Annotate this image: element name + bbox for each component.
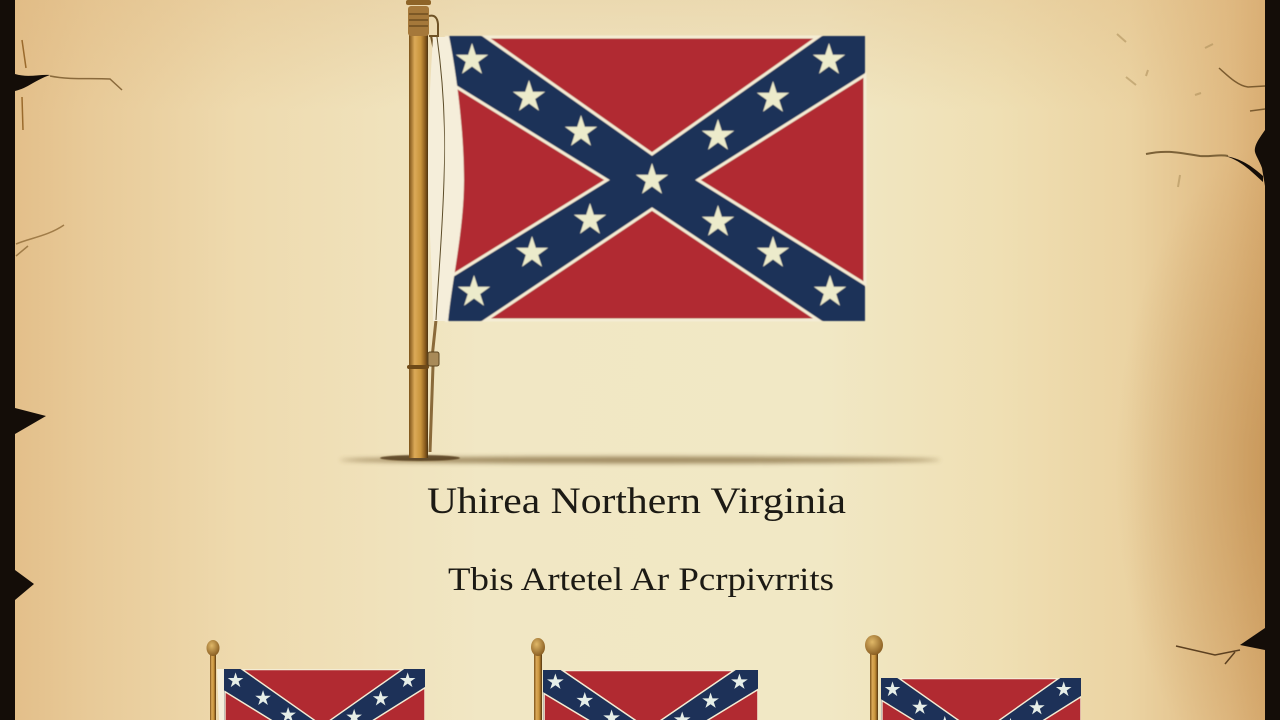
parchment background bbox=[0, 0, 1280, 187]
flag field bbox=[445, 36, 865, 322]
left border with cracks bbox=[0, 0, 122, 720]
small flag 2 bbox=[531, 638, 758, 720]
subtitle: Tbis Artetel Ar Pcrpivrrits bbox=[448, 562, 834, 598]
title: Uhirea Northern Virginia bbox=[427, 481, 846, 522]
small flag 1 bbox=[206, 640, 425, 720]
main flagpole bbox=[406, 0, 439, 458]
right border with cracks bbox=[1146, 0, 1280, 720]
flag hoist band bbox=[428, 37, 464, 321]
small flag 3 bbox=[865, 635, 1081, 720]
main flag bbox=[428, 36, 865, 322]
ground shadow under main flag bbox=[340, 455, 940, 464]
